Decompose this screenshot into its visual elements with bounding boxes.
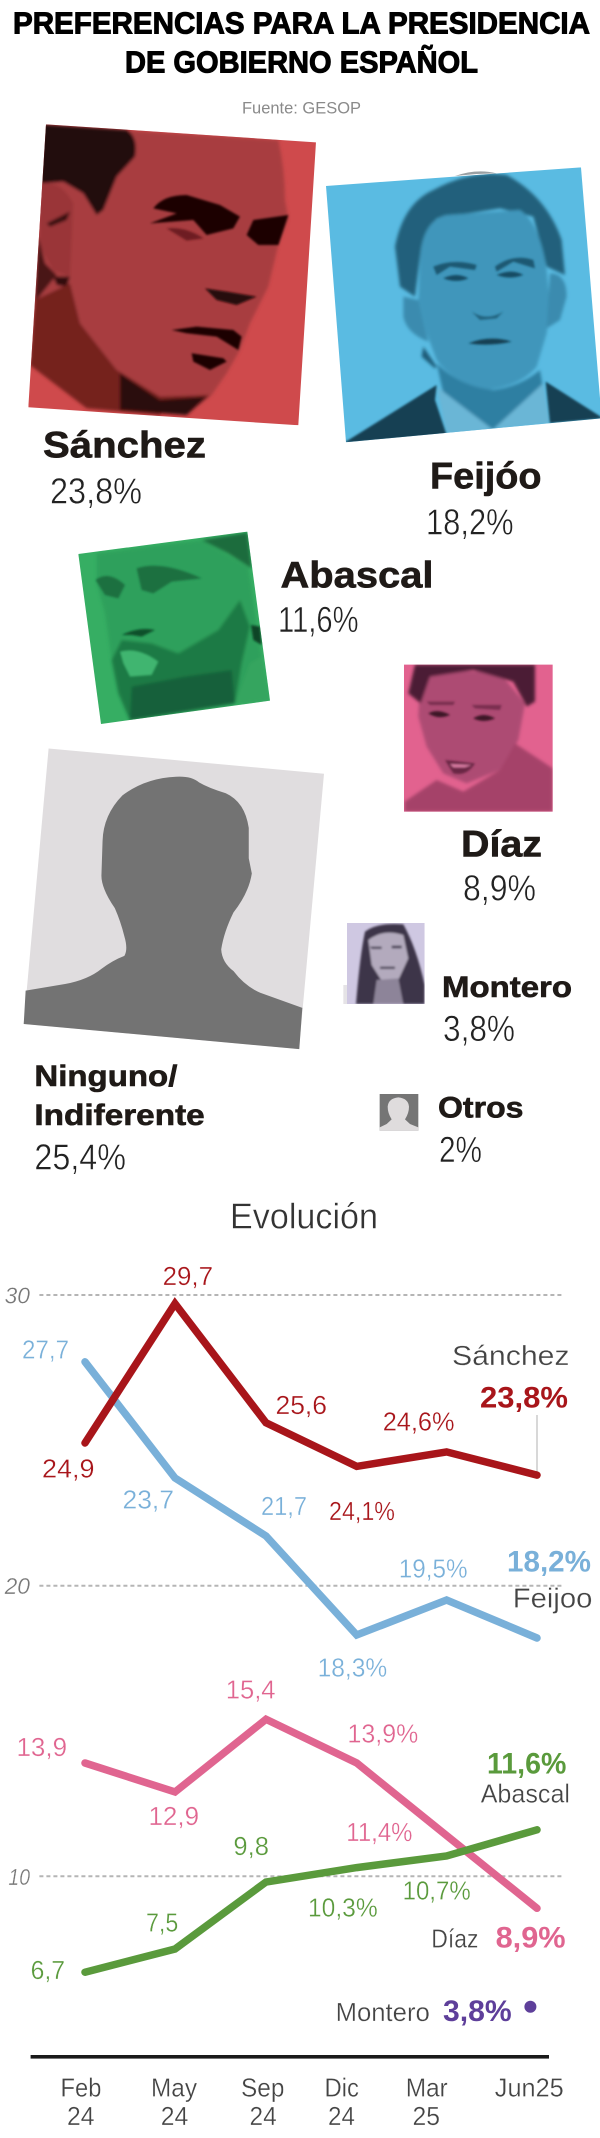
title (13, 6, 590, 80)
series: Feijóo: 23,7 (122, 1484, 174, 1514)
x axis: Dic (324, 2073, 359, 2103)
label: Abascal (278, 555, 434, 640)
label: Abascal: Abascal (280, 555, 434, 596)
series: Abascal: 11,6% (487, 1747, 566, 1780)
series: Feijóo: Feijoo (513, 1583, 592, 1614)
x axis: 25 (412, 2101, 440, 2131)
x axis: 24 (161, 2101, 188, 2131)
label: Feijóo (426, 455, 542, 542)
label: Díaz (461, 824, 542, 909)
x axis: Feb (60, 2073, 101, 2103)
label: Otros (438, 1092, 524, 1170)
series: Sánchez: 24,1% (329, 1496, 395, 1526)
line chart: evolution (4, 1261, 592, 2131)
series: Díaz (16, 1674, 566, 1954)
series: Díaz: 12,9 (148, 1801, 199, 1831)
label: Abascal: 11,6% (278, 599, 359, 640)
series: Abascal: 6,7 (31, 1955, 65, 1985)
label: Montero: 3,8% (443, 1008, 515, 1049)
series: Sánchez: 25,6 (276, 1390, 327, 1420)
series: Sánchez: 24,6% (383, 1407, 455, 1437)
series: Díaz: 11,4% (346, 1817, 412, 1847)
series: Díaz: 8,9% (496, 1921, 566, 1954)
label: Feijóo: Feijóo (430, 455, 542, 496)
portrait: Díaz (404, 664, 553, 812)
label: Ninguno / Indiferente: 25,4% (34, 1137, 126, 1178)
series: Abascal: Abascal (481, 1779, 570, 1809)
series: Feijóo: 19,5% (399, 1553, 468, 1583)
label: Ninguno / Indiferente: Indiferente (34, 1099, 205, 1132)
label: Ninguno / Indiferente (34, 1060, 205, 1178)
label: Ninguno / Indiferente: Ninguno/ (34, 1060, 178, 1093)
x axis: 24 (67, 2101, 94, 2131)
label: Montero: Montero (442, 971, 572, 1004)
series: Díaz: 15,4 (226, 1674, 276, 1704)
series: Abascal: 10,7% (403, 1875, 471, 1905)
series: Feijóo (22, 1334, 592, 1683)
x axis (31, 2055, 564, 2131)
label: Sánchez: 23,8% (50, 470, 142, 511)
y axis and gridlines: 10 (8, 1864, 30, 1890)
series: Montero: Montero (336, 1997, 430, 2027)
x axis: May (151, 2073, 197, 2103)
label: Feijóo: 18,2% (426, 501, 514, 542)
series: Sánchez: Sánchez (452, 1340, 570, 1371)
icon: Otros silhouette (380, 1094, 418, 1131)
series: Montero: 3,8% (443, 1995, 512, 2028)
label: Díaz: 8,9% (463, 868, 536, 909)
series: Sánchez: 24,9 (42, 1453, 94, 1483)
series: Abascal (31, 1747, 570, 1985)
y axis and gridlines: 30 (5, 1282, 30, 1308)
title: PREFERENCIAS PARA LA PRESIDENCIA (13, 6, 590, 40)
label: Otros: 2% (439, 1129, 482, 1170)
series: Sánchez: 29,7 (163, 1261, 213, 1291)
label: Otros: Otros (438, 1092, 524, 1125)
portrait: Feijóo (320, 160, 600, 447)
portrait: Ninguno / Indiferente silhouette (24, 748, 324, 1049)
series: Sánchez (42, 1261, 570, 1526)
series: Feijóo: 21,7 (261, 1491, 307, 1521)
source note: Fuente: GESOP (242, 99, 361, 118)
x axis: 24 (328, 2101, 355, 2131)
series: Feijóo: 18,2% (507, 1546, 591, 1579)
series: Feijóo: 18,3% (318, 1653, 387, 1683)
portrait: Sánchez (20, 120, 327, 430)
x axis: Jun25 (495, 2073, 564, 2103)
series: Díaz: 13,9 (16, 1732, 67, 1762)
y axis and gridlines (4, 1282, 562, 1890)
x axis: 24 (250, 2101, 277, 2131)
portrait: Montero (343, 923, 425, 1004)
series: Díaz: Díaz (431, 1923, 478, 1953)
series: Feijóo: 27,7 (22, 1334, 69, 1364)
label: Díaz: Díaz (461, 824, 542, 864)
label: Sánchez (43, 424, 206, 511)
label: Sánchez: Sánchez (43, 424, 206, 465)
series: Sánchez: 23,8% (480, 1381, 568, 1414)
series: Abascal: 7,5 (146, 1908, 178, 1938)
title: DE GOBIERNO ESPAÑOL (125, 45, 478, 80)
series: Abascal: 10,3% (308, 1893, 378, 1923)
chart heading: Evolución (230, 1195, 378, 1236)
series: Montero (336, 1995, 536, 2028)
x axis: Sep (241, 2073, 284, 2103)
portrait: Abascal (75, 530, 275, 727)
x axis: Mar (406, 2073, 448, 2103)
y axis and gridlines: 20 (4, 1573, 30, 1599)
series: Díaz: 13,9% (348, 1719, 418, 1749)
series: Abascal: 9,8 (233, 1831, 269, 1861)
label: Montero (442, 971, 572, 1049)
